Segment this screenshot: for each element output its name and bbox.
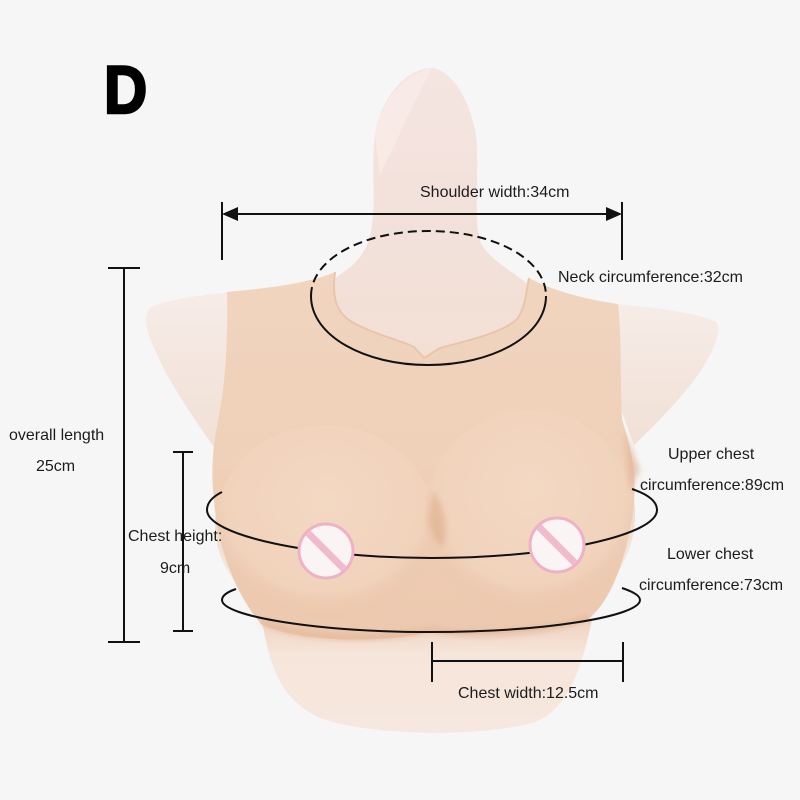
- chest height label: [128, 528, 222, 577]
- overall length label: [9, 427, 104, 475]
- neck circumference ellipse: [311, 231, 546, 365]
- mannequin neck: [318, 68, 535, 375]
- upper chest circumference ring: [207, 489, 657, 558]
- overall length dimension: [108, 268, 140, 642]
- chest width dimension: [432, 642, 623, 682]
- pedestal base: [262, 620, 592, 733]
- neck circumference label: Neck circumference:32cm: [558, 269, 743, 286]
- right bust shading: [425, 410, 635, 620]
- chest height label: 9cm: [160, 560, 190, 577]
- silicone body form: [212, 272, 635, 640]
- left arm stump: [146, 292, 240, 447]
- right censor badge: [530, 518, 584, 572]
- mannequin neck cut face: [375, 68, 432, 175]
- left censor badge: [299, 524, 353, 578]
- left bust shading: [215, 425, 435, 625]
- right arm stump: [610, 304, 719, 445]
- upper chest label: [640, 446, 784, 494]
- lower hem shadow: [262, 618, 588, 638]
- chest height label: Chest height:: [128, 528, 222, 545]
- chest width label: Chest width:12.5cm: [458, 685, 599, 702]
- upper chest label: circumference:89cm: [640, 477, 784, 494]
- overall length label: 25cm: [36, 458, 75, 475]
- lower chest circumference ring: [222, 588, 640, 632]
- right side shadow: [624, 430, 640, 490]
- lower chest label: [639, 546, 783, 594]
- heading letter D: D: [104, 51, 147, 128]
- upper chest label: Upper chest: [668, 446, 755, 463]
- shoulder width dimension: [222, 184, 622, 260]
- mannequin figure: [146, 68, 719, 733]
- neckline inner shading: [334, 272, 529, 358]
- lower chest label: circumference:73cm: [639, 577, 783, 594]
- overall length label: overall length: [9, 427, 104, 444]
- shoulder width label: Shoulder width:34cm: [420, 184, 569, 201]
- centre crease shadow: [429, 490, 446, 548]
- lower chest label: Lower chest: [667, 546, 754, 563]
- chest height dimension: [173, 452, 193, 631]
